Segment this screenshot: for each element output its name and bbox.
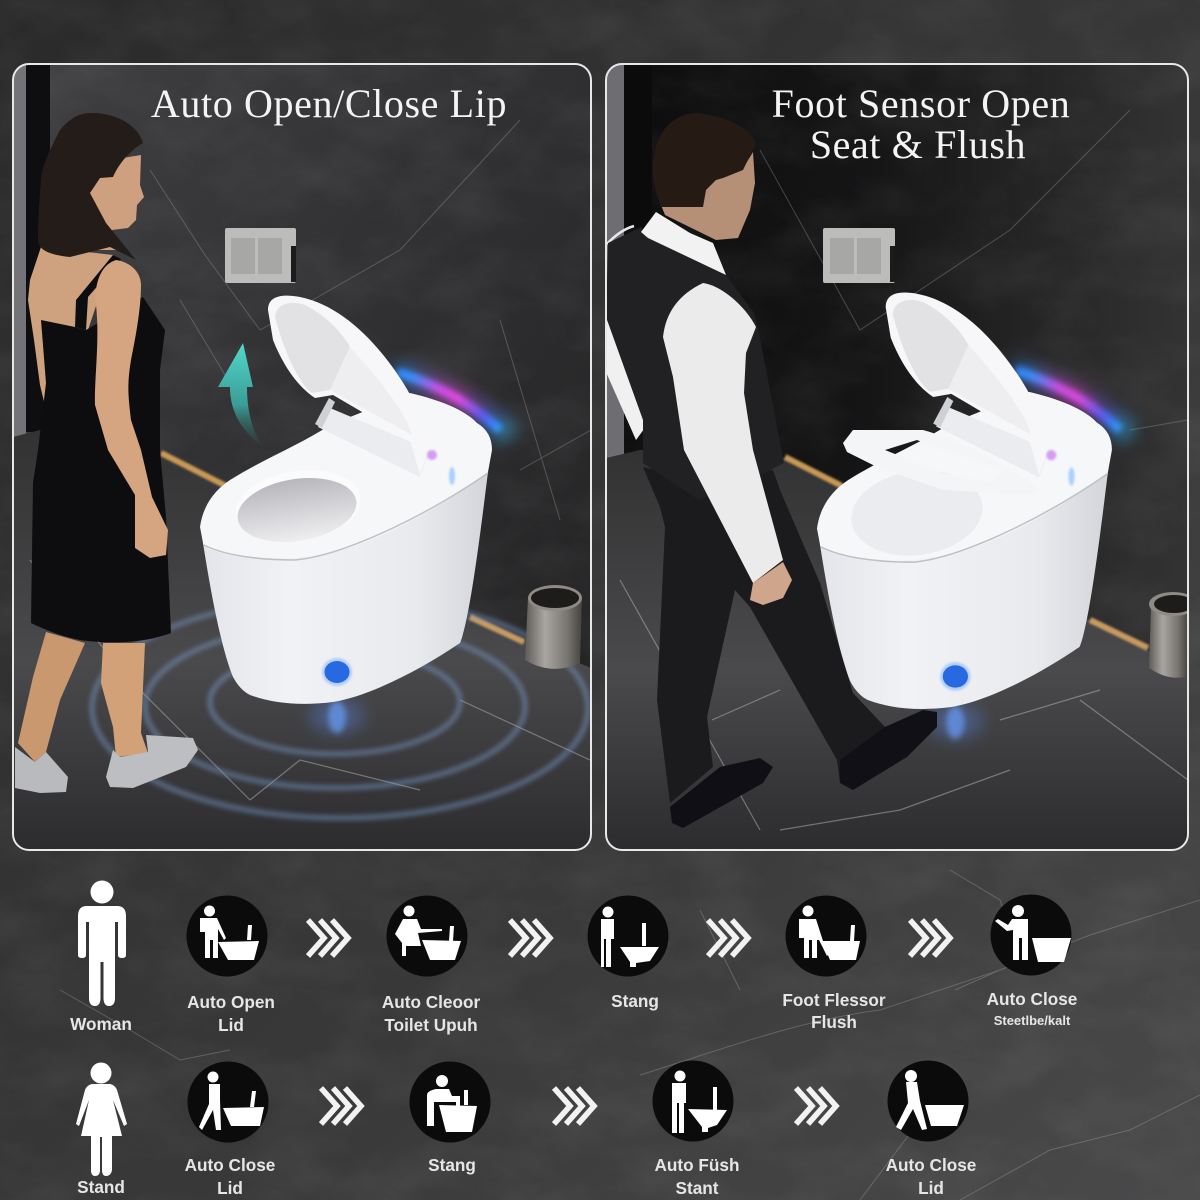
wall switch bbox=[225, 228, 296, 283]
arrow bbox=[510, 920, 550, 956]
dress bbox=[31, 297, 171, 642]
arrow bbox=[796, 1088, 836, 1124]
label: auto flush start: Auto Füsh bbox=[655, 1155, 739, 1175]
label: auto close seat: Steetlbe/kalt bbox=[994, 1013, 1071, 1028]
label: auto close lid: Auto Close bbox=[185, 1155, 275, 1175]
label: auto close lid: Auto Close bbox=[886, 1155, 976, 1175]
label: auto close seat: Auto Close bbox=[987, 989, 1077, 1009]
rear sleeve bbox=[607, 320, 643, 440]
collar bbox=[641, 212, 726, 275]
label: auto cleanse: Auto Cleoor bbox=[382, 992, 480, 1012]
label: auto close lid: Lid bbox=[918, 1178, 944, 1198]
waste bin bbox=[1149, 592, 1187, 678]
label: auto close lid: Lid bbox=[217, 1178, 243, 1198]
label: auto cleanse: Toilet Upuh bbox=[384, 1015, 478, 1035]
row 2: woman workflow bbox=[76, 1060, 976, 1198]
waste bin bbox=[525, 585, 582, 669]
label: auto open lid: Auto Open bbox=[187, 992, 275, 1012]
icon: man pictogram bbox=[78, 880, 126, 1006]
man figure bbox=[606, 113, 937, 828]
legs bbox=[18, 632, 85, 762]
heading: foot sensor open seat and flush: Seat & Flush bbox=[810, 122, 1026, 167]
panel 2 border bbox=[606, 64, 1188, 850]
face bbox=[88, 155, 144, 250]
icon: auto cleanse bbox=[386, 896, 468, 976]
teal up arrow bbox=[218, 343, 260, 442]
arrow bbox=[321, 1088, 361, 1124]
icon: stang seated bbox=[410, 1062, 490, 1142]
label: foot flessor flush: Flush bbox=[811, 1012, 857, 1032]
icon: auto close lid leave bbox=[888, 1060, 968, 1142]
icon: auto close lid walk bbox=[188, 1062, 268, 1142]
heading: auto open/close lip: Auto Open/Close Lip bbox=[151, 81, 507, 126]
vest bbox=[606, 227, 784, 500]
trousers bbox=[643, 467, 885, 803]
wall and floor bbox=[606, 64, 1188, 850]
label: stang: Stang bbox=[611, 991, 659, 1011]
label: woman: Woman bbox=[70, 1014, 132, 1034]
arrow bbox=[308, 920, 348, 956]
open bowl bbox=[852, 472, 982, 556]
label: stang: Stang bbox=[428, 1155, 476, 1175]
panel 1 border bbox=[13, 64, 591, 850]
icon: woman pictogram bbox=[76, 1062, 127, 1176]
back bbox=[28, 247, 113, 410]
panel: foot sensor bbox=[606, 64, 1197, 850]
sensor rings bbox=[92, 598, 588, 818]
hand bbox=[750, 562, 792, 605]
wall and floor bbox=[13, 64, 591, 850]
hair bbox=[653, 113, 756, 207]
panel: auto open/close lid bbox=[13, 64, 591, 850]
shoes bbox=[670, 758, 773, 828]
arrow bbox=[708, 920, 748, 956]
icon: foot sensor flush bbox=[786, 896, 866, 976]
shoes bbox=[15, 747, 68, 793]
label: auto open lid: Lid bbox=[218, 1015, 244, 1035]
sleeve bbox=[663, 283, 783, 583]
label: stand: Stand bbox=[77, 1177, 125, 1197]
wall switch bbox=[823, 228, 895, 283]
raised seat bbox=[843, 430, 977, 492]
arrow bbox=[910, 920, 950, 956]
icon: auto flush bbox=[652, 1060, 734, 1142]
woman figure bbox=[15, 113, 198, 793]
neck and face bbox=[661, 152, 755, 240]
arm bbox=[95, 260, 168, 558]
toilet with raised lid bbox=[817, 293, 1130, 740]
icon: auto close seat bbox=[990, 894, 1072, 976]
heading: foot sensor open seat and flush: Foot Sensor Open bbox=[772, 81, 1070, 126]
row 1: man workflow bbox=[70, 880, 1077, 1035]
toilet with raised lid bbox=[200, 296, 510, 734]
icon: auto open lid bbox=[186, 896, 268, 976]
shoulder line bbox=[607, 226, 634, 244]
label: auto flush start: Stant bbox=[676, 1178, 719, 1198]
hair bbox=[38, 113, 143, 260]
arrow bbox=[554, 1088, 594, 1124]
icon: stang bbox=[588, 896, 668, 976]
strap bbox=[75, 255, 121, 330]
label: foot flessor flush: Foot Flessor bbox=[782, 990, 886, 1010]
